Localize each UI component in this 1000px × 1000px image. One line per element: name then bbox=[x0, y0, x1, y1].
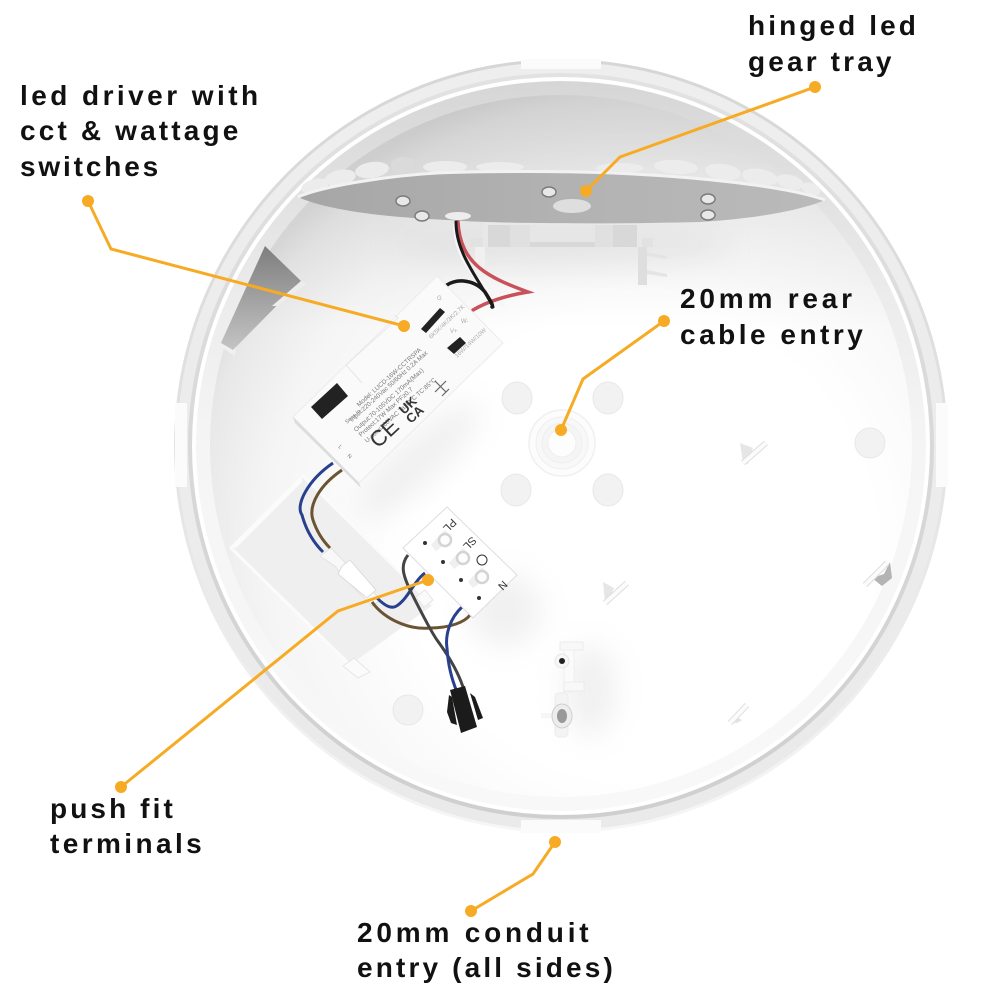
wires from tray to driver bbox=[447, 222, 528, 310]
label: hinged led gear tray: gear tray bbox=[748, 46, 895, 77]
driver text: Input:220-240Vac 50/60Hz 0.2A Max bbox=[349, 349, 430, 423]
screw bosses bbox=[393, 382, 885, 725]
driver text: Output:70-105VDC 170mA(Max) bbox=[353, 367, 425, 433]
led driver bbox=[293, 276, 503, 488]
push fit terminal block: SL bbox=[460, 534, 478, 552]
leader: push fit terminals bbox=[115, 574, 434, 793]
push fit terminal block: N bbox=[495, 578, 509, 592]
clip 1 bbox=[740, 443, 766, 464]
switch legends: V+ bbox=[450, 329, 458, 335]
label: push fit terminals: push fit bbox=[50, 793, 176, 824]
label: hinged led gear tray: hinged led bbox=[748, 10, 919, 41]
switch: wattage bbox=[447, 337, 466, 354]
CE and UKCA marks bbox=[364, 393, 427, 453]
switch: cct bbox=[421, 308, 445, 333]
clip 2 bbox=[603, 582, 627, 603]
driver text: L bbox=[337, 444, 343, 451]
label: push fit terminals: terminals bbox=[50, 828, 205, 859]
rear cable entry grommet bbox=[529, 410, 595, 476]
soft floor shadows bbox=[347, 223, 730, 736]
callout leaders bbox=[82, 81, 821, 917]
driver text: N bbox=[346, 453, 353, 460]
terminal block wires bbox=[372, 555, 470, 692]
switch legends bbox=[428, 296, 488, 359]
tray screws bbox=[396, 187, 715, 221]
CE and UKCA marks: CE bbox=[364, 414, 404, 453]
label: led driver: cct & wattage bbox=[20, 115, 241, 146]
label: led driver: switches bbox=[20, 151, 161, 182]
driver text: U-out:≤200VAC Ta:40°C TC:85°C bbox=[363, 376, 438, 444]
driver text: Model: LUCD-16W-CCTRSPA bbox=[356, 346, 424, 408]
small clips on floor bbox=[603, 443, 892, 723]
leader: hinged led gear tray bbox=[580, 81, 821, 197]
product: luminaire base bbox=[174, 59, 948, 833]
driver text bbox=[337, 346, 438, 460]
connector socket bbox=[311, 383, 348, 419]
CE and UKCA marks: UK bbox=[396, 393, 420, 417]
driver output wires bbox=[300, 463, 342, 552]
CE and UKCA marks: CA bbox=[403, 402, 427, 426]
black connector plug bbox=[447, 686, 483, 733]
tray hole bbox=[553, 199, 591, 213]
rim clips bbox=[175, 59, 948, 833]
push fit terminal block: PL bbox=[440, 516, 458, 534]
LED lens ring bbox=[300, 157, 822, 198]
leader: led driver bbox=[82, 195, 410, 332]
label: conduit entry: 20mm conduit bbox=[357, 917, 592, 948]
left wall bracket bbox=[218, 246, 306, 356]
leader: conduit entry bbox=[465, 836, 561, 917]
driver text: Protect:17W Max PF≥0.7 bbox=[358, 386, 415, 438]
clip 3 bbox=[730, 705, 747, 723]
switch legends: G bbox=[437, 296, 442, 302]
hinged gear tray bbox=[298, 157, 825, 285]
tray plate bbox=[298, 172, 825, 223]
push fit terminal block bbox=[403, 507, 517, 618]
label: rear cable entry: 20mm rear bbox=[680, 283, 856, 314]
driver text: Sens in bbox=[344, 409, 362, 425]
label: conduit entry: entry (all sides) bbox=[357, 952, 616, 983]
mounting keyhole and screw bbox=[541, 642, 584, 737]
label: rear cable entry: cable entry bbox=[680, 319, 866, 350]
switch legends: 6K5K/4K/3K/2.7K bbox=[428, 304, 467, 340]
switch legends: W- bbox=[461, 319, 469, 325]
recycling mark bbox=[435, 381, 449, 396]
wiring channel bbox=[230, 475, 433, 678]
inline connector bbox=[320, 548, 380, 606]
bracket bbox=[470, 218, 667, 285]
outer rim bbox=[174, 59, 948, 833]
inner floor bbox=[210, 95, 912, 797]
label: led driver: led driver with bbox=[20, 80, 262, 111]
leader: rear cable entry bbox=[555, 315, 670, 436]
clip 4 bbox=[865, 562, 892, 586]
switch legends: 16W/14W/10W bbox=[454, 327, 488, 359]
